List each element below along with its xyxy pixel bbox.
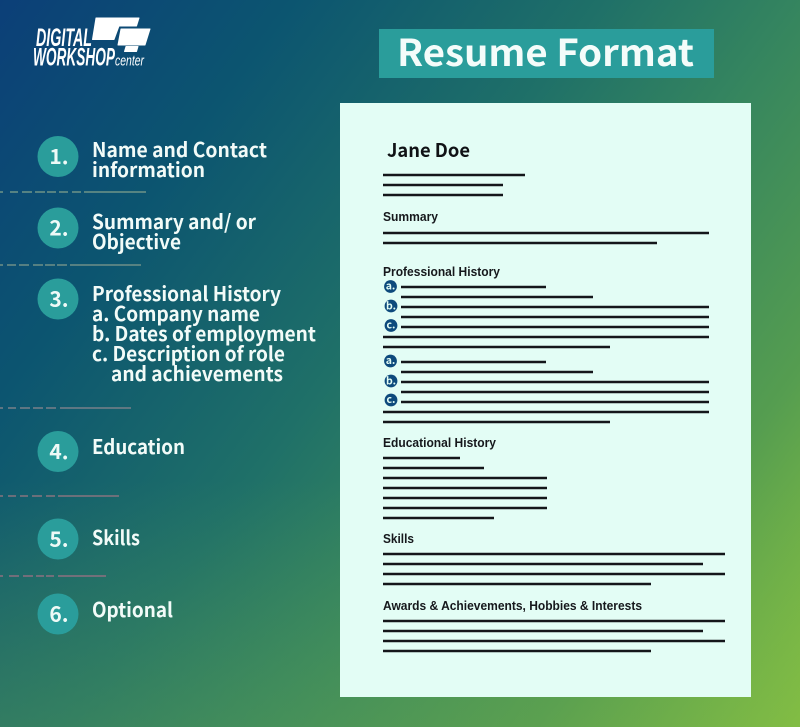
step 1: Name and Contact bbox=[92, 134, 268, 163]
bullets second job: a. bbox=[386, 353, 395, 368]
step 3: a. Company name bbox=[92, 298, 260, 327]
step 1 bbox=[38, 134, 268, 183]
section: professional history: Professional History bbox=[383, 265, 500, 279]
step 4: Education bbox=[92, 431, 185, 460]
step 2: Objective bbox=[92, 226, 181, 255]
step 3 bbox=[38, 278, 317, 387]
step 2: 2. bbox=[49, 212, 69, 242]
step 2 bbox=[38, 206, 256, 255]
step 6: Optional bbox=[92, 594, 173, 623]
bullets second job: b. bbox=[386, 374, 396, 388]
section: professional history bbox=[383, 265, 709, 422]
bullets first job bbox=[384, 278, 397, 332]
lines second job bbox=[383, 362, 709, 422]
section: skills bbox=[383, 532, 725, 584]
section: summary: Summary bbox=[383, 210, 438, 224]
title banner: Resume Format bbox=[397, 23, 694, 77]
logo wordmark: WORKSHOP bbox=[33, 44, 115, 72]
step 4 bbox=[38, 431, 185, 472]
resume name: Jane Doe bbox=[387, 136, 470, 163]
step 2: Summary and/ or bbox=[92, 206, 256, 235]
section: awards and hobbies bbox=[383, 599, 725, 651]
step 6 bbox=[38, 594, 173, 634]
section: educational history: Educational History bbox=[383, 436, 496, 450]
step 5: 5. bbox=[49, 524, 69, 554]
lines first job bbox=[383, 287, 709, 347]
step 3: b. Dates of employment bbox=[92, 318, 317, 347]
bullets first job: a. bbox=[386, 278, 395, 294]
dashed dividers bbox=[0, 191, 146, 193]
step 3: and achievements bbox=[111, 358, 283, 387]
section: summary bbox=[383, 210, 709, 243]
bullets first job: c. bbox=[387, 318, 395, 332]
panel: resume page bbox=[340, 103, 751, 697]
step 4: 4. bbox=[49, 436, 69, 466]
step 3: 3. bbox=[49, 284, 69, 314]
logo wordmark: center bbox=[115, 52, 145, 70]
bullets first job: b. bbox=[386, 298, 396, 314]
section: awards and hobbies: Awards & Achievements, Hobbies & Interests bbox=[383, 599, 642, 613]
step 1: 1. bbox=[49, 141, 69, 171]
step 6: 6. bbox=[49, 598, 69, 628]
bullets second job: c. bbox=[387, 392, 395, 407]
step 3: Professional History bbox=[92, 278, 281, 307]
logo: Digital Workshop Center bbox=[33, 18, 150, 72]
logo wordmark bbox=[33, 24, 145, 72]
icon: monitors bbox=[92, 18, 150, 52]
step 5 bbox=[38, 518, 140, 560]
logo wordmark: DIGITAL bbox=[36, 24, 92, 52]
step 3: c. Description of role bbox=[92, 338, 285, 367]
bullets second job bbox=[384, 353, 397, 407]
contact lines bbox=[383, 175, 525, 195]
section: educational history bbox=[383, 436, 547, 518]
step 5: Skills bbox=[92, 522, 140, 551]
step 1: information bbox=[92, 154, 205, 183]
section: skills: Skills bbox=[383, 532, 414, 546]
